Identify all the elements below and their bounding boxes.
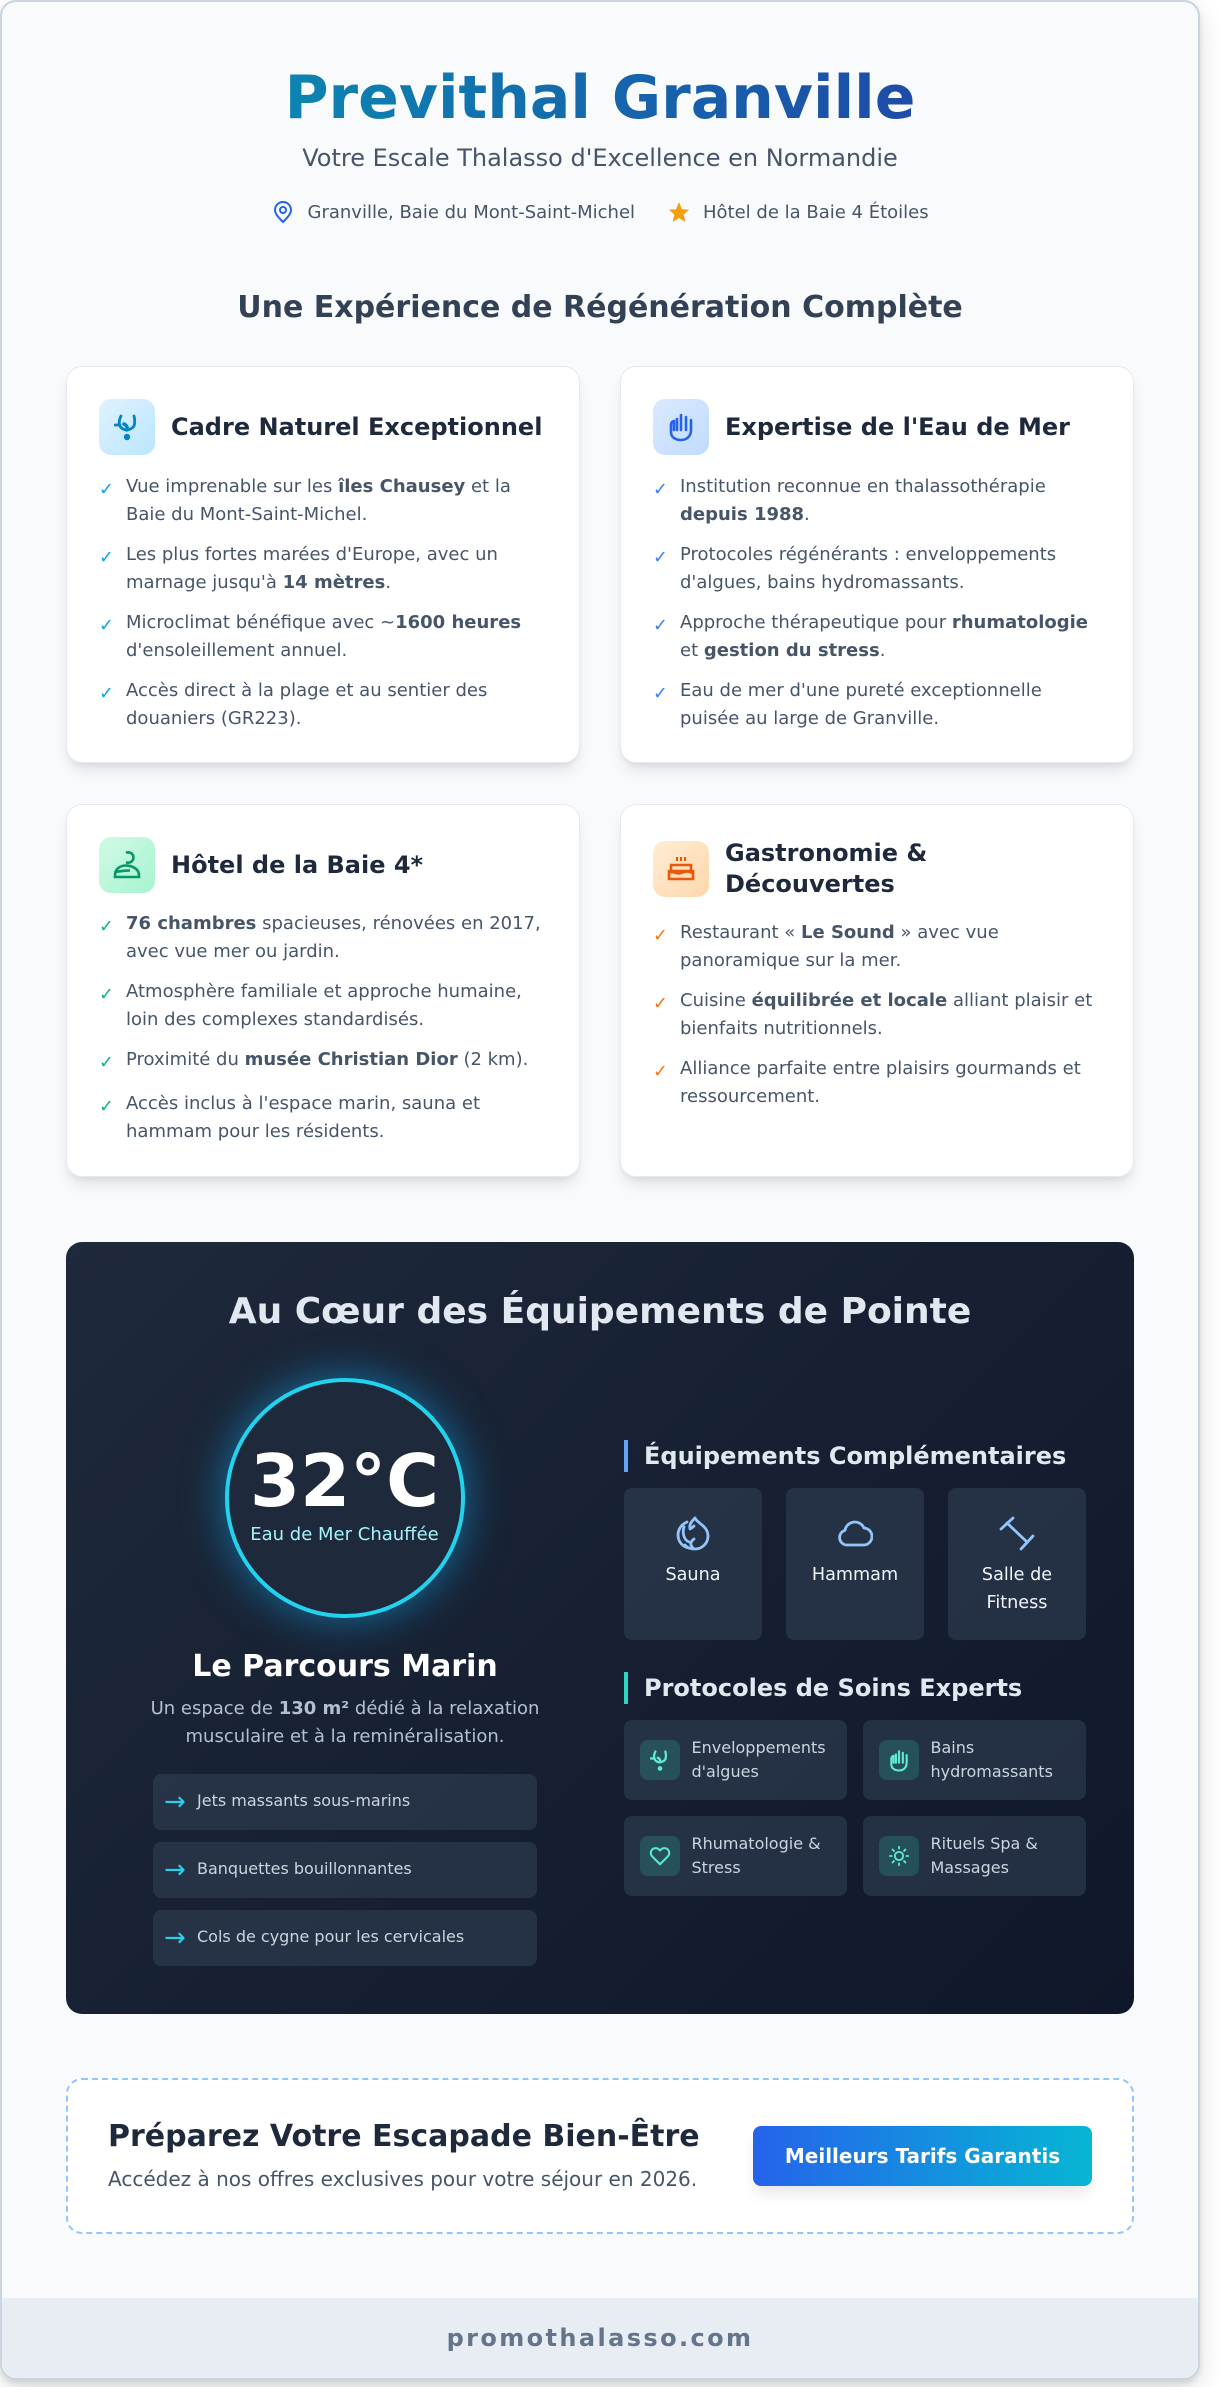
list: Alliance parfaite entre plaisirs gourmands et <box>680 1058 1081 1078</box>
temperature value: 32°C <box>250 1439 439 1523</box>
list: ✓ <box>99 917 114 937</box>
list: ✓ <box>653 684 668 704</box>
icon: sun <box>879 1836 919 1876</box>
card title <box>725 839 927 898</box>
CTA heading: Préparez Votre Escapade Bien-Être <box>108 2119 700 2154</box>
parcours heading: Le Parcours Marin <box>192 1649 498 1684</box>
list: Atmosphère familiale et approche humaine, <box>126 981 522 1002</box>
list: Proximité du musée Christian Dior (2 km). <box>126 1049 528 1070</box>
heading: équipements complémentaires: Équipements Complémentaires <box>644 1442 1066 1470</box>
tile: sauna: Sauna <box>665 1565 721 1585</box>
list: Accès inclus à l'espace marin, sauna et <box>126 1093 480 1114</box>
panel: gastronomie <box>620 804 1134 1177</box>
list: Approche thérapeutique pour rhumatologie <box>680 612 1088 632</box>
tile: enveloppements <box>624 1720 847 1800</box>
list: Baie du Mont-Saint-Michel. <box>126 504 367 524</box>
card title: Gastronomie & <box>725 839 927 867</box>
card title: Expertise de l'Eau de Mer <box>725 413 1070 441</box>
button: Meilleurs Tarifs Garantis <box>785 2144 1060 2168</box>
list <box>653 922 1092 1106</box>
list: ✓ <box>99 985 114 1005</box>
list: Accès direct à la plage et au sentier des <box>126 680 487 700</box>
button <box>753 2126 1092 2186</box>
list: depuis 1988. <box>680 504 810 524</box>
list <box>653 476 1088 728</box>
panel: cadre naturel <box>66 366 580 763</box>
location text: Granville, Baie du Mont-Saint-Michel <box>308 202 635 222</box>
tile: hammam: Hammam <box>812 1565 898 1585</box>
list: ✓ <box>653 616 668 636</box>
tile: rituels: Massages <box>930 1858 1009 1877</box>
icon: heart <box>640 1836 680 1876</box>
icon: dish <box>653 841 709 897</box>
tile: fitness: Salle de <box>982 1565 1052 1585</box>
icon: hand <box>653 399 709 455</box>
temperature circle <box>225 1378 465 1618</box>
card title: Hôtel de la Baie 4* <box>171 851 423 879</box>
icon: anchor <box>99 399 155 455</box>
tile: enveloppements: Enveloppements <box>692 1738 826 1757</box>
item: jets <box>153 1774 537 1830</box>
section heading: Une Expérience de Régénération Complète <box>237 290 963 325</box>
panel: expertise <box>620 366 1134 763</box>
tile: bains <box>863 1720 1086 1800</box>
list: Protocoles régénérants : enveloppements <box>680 544 1056 564</box>
list: Eau de mer d'une pureté exceptionnelle <box>680 680 1042 700</box>
item: jets: → <box>164 1787 186 1817</box>
CTA text: Accédez à nos offres exclusives pour votre séjour en 2026. <box>108 2167 697 2191</box>
list: d'ensoleillement annuel. <box>126 640 347 660</box>
list: ✓ <box>99 548 114 568</box>
list: ressourcement. <box>680 1086 820 1106</box>
list: 76 chambres spacieuses, rénovées en 2017, <box>126 913 541 934</box>
list: ✓ <box>99 480 114 500</box>
heading: protocoles: Protocoles de Soins Experts <box>644 1674 1022 1702</box>
tile: hammam <box>786 1488 924 1640</box>
tile: rituels: Rituels Spa & <box>930 1834 1038 1853</box>
list <box>99 476 521 728</box>
list: Les plus fortes marées d'Europe, avec un <box>126 544 498 564</box>
tile: rhumatologie: Stress <box>692 1858 741 1877</box>
list: ✓ <box>653 994 668 1014</box>
item: banquettes: Banquettes bouillonnantes <box>197 1859 412 1878</box>
item: banquettes: → <box>164 1855 186 1885</box>
tile: fitness <box>948 1488 1086 1640</box>
tile: enveloppements: d'algues <box>692 1762 759 1781</box>
list: ✓ <box>99 616 114 636</box>
list: ✓ <box>653 548 668 568</box>
list: Vue imprenable sur les îles Chausey et la <box>126 476 511 496</box>
panel heading: Au Cœur des Équipements de Pointe <box>229 1291 971 1332</box>
panel: hotel <box>66 804 580 1177</box>
title: Previthal Granville <box>285 63 915 133</box>
parcours description: Un espace de 130 m² dédié à la relaxation <box>151 1698 539 1719</box>
header <box>237 63 963 325</box>
footer: promothalasso.com <box>447 2324 753 2352</box>
list: ✓ <box>653 926 668 946</box>
list: avec vue mer ou jardin. <box>126 941 340 962</box>
item: jets: Jets massants sous-marins <box>197 1791 410 1810</box>
footer <box>2 2298 1198 2378</box>
item: cols de cygne <box>153 1910 537 1966</box>
tile: bains: Bains <box>930 1738 974 1757</box>
icon: hand <box>879 1740 919 1780</box>
tile: bains: hydromassants <box>930 1762 1053 1781</box>
parcours description: musculaire et à la reminéralisation. <box>186 1726 504 1747</box>
icon: anchor <box>640 1740 680 1780</box>
list: ✓ <box>99 1053 114 1073</box>
list: puisée au large de Granville. <box>680 708 939 728</box>
list: ✓ <box>99 1097 114 1117</box>
list: ✓ <box>653 480 668 500</box>
list: et gestion du stress. <box>680 640 885 660</box>
list: Cuisine équilibrée et locale alliant plaisir et <box>680 990 1092 1010</box>
card title: Découvertes <box>725 870 895 898</box>
list: ✓ <box>653 1062 668 1082</box>
list <box>99 913 541 1142</box>
tile: sauna <box>624 1488 762 1640</box>
list: ✓ <box>99 684 114 704</box>
tile: rituels <box>863 1816 1086 1896</box>
list: d'algues, bains hydromassants. <box>680 572 965 592</box>
list: Institution reconnue en thalassothérapie <box>680 476 1046 496</box>
item: cols de cygne: Cols de cygne pour les cervicales <box>197 1927 464 1946</box>
list: Restaurant « Le Sound » avec vue <box>680 922 999 942</box>
item: cols de cygne: → <box>164 1923 186 1953</box>
tile: rhumatologie <box>624 1816 847 1896</box>
list: marnage jusqu'à 14 mètres. <box>126 572 391 592</box>
parcours description <box>151 1698 539 1747</box>
tile: rhumatologie: Rhumatologie & <box>692 1834 821 1853</box>
tile: fitness: Fitness <box>987 1593 1047 1613</box>
card title: Cadre Naturel Exceptionnel <box>171 413 542 441</box>
panel: équipements <box>66 1242 1134 2014</box>
call to action <box>66 2078 1134 2234</box>
list: bienfaits nutritionnels. <box>680 1018 883 1038</box>
list: panoramique sur la mer. <box>680 950 901 970</box>
list: Microclimat bénéfique avec ~1600 heures <box>126 612 521 632</box>
list: hammam pour les résidents. <box>126 1121 384 1142</box>
list: douaniers (GR223). <box>126 708 301 728</box>
icon: star <box>669 202 689 222</box>
icon: location pin <box>274 201 292 224</box>
item: banquettes <box>153 1842 537 1898</box>
temperature label: Eau de Mer Chauffée <box>250 1524 439 1545</box>
list: loin des complexes standardisés. <box>126 1009 424 1030</box>
subtitle: Votre Escale Thalasso d'Excellence en Normandie <box>302 144 898 172</box>
icon: guest <box>99 837 155 893</box>
hotel rating text: Hôtel de la Baie 4 Étoiles <box>703 202 929 222</box>
